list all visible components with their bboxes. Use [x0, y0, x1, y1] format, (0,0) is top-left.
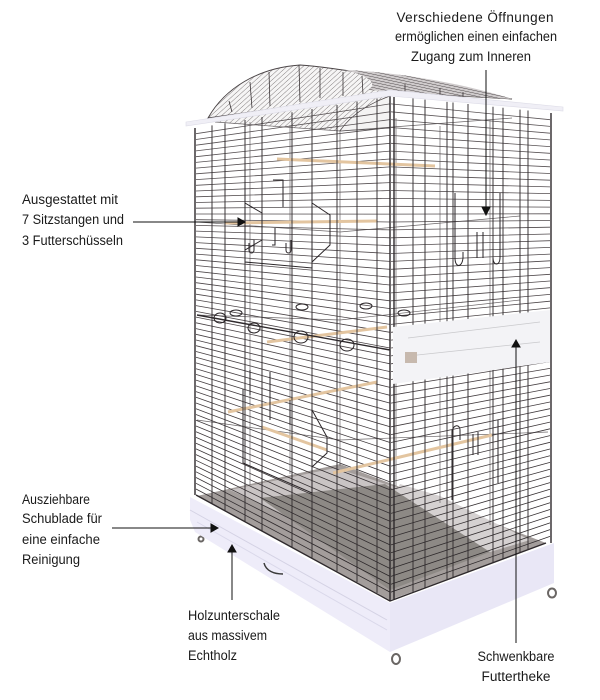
- vertical wires: [212, 98, 528, 593]
- doors, hooks and feed bowls: [243, 180, 500, 500]
- corner posts and frame: [195, 96, 551, 601]
- domed roof: [208, 65, 512, 131]
- swivel feeding counter: [393, 310, 550, 384]
- callout: openings: [395, 10, 557, 64]
- callout: swivel counter: [478, 649, 554, 684]
- callout: drawer: eine einfache: [22, 532, 100, 547]
- arrow: drawer: [112, 524, 218, 532]
- callout: solid wood base: Holzunterschale: [188, 608, 280, 623]
- arrow: wood base: [228, 545, 236, 600]
- callout: perches and bowls: [22, 192, 124, 248]
- callout: solid wood base: aus massivem: [188, 628, 267, 643]
- callout: openings: Zugang zum Inneren: [411, 49, 531, 64]
- back wires: [197, 118, 548, 525]
- horizontal wires: right face: [391, 104, 550, 592]
- arrow: openings: [482, 70, 490, 215]
- wooden base: [190, 497, 554, 652]
- perches: [225, 159, 492, 473]
- roof rim: [186, 90, 563, 126]
- callout: solid wood base: [188, 608, 280, 663]
- cage illustration: [186, 65, 563, 664]
- callout: solid wood base: Echtholz: [188, 648, 237, 663]
- callout: perches and bowls: Ausgestattet mit: [22, 192, 118, 207]
- arrow: perches: [133, 218, 245, 226]
- callout: drawer: Ausziehbare: [22, 492, 90, 507]
- callout: openings: Verschiedene Öffnungen: [396, 10, 554, 25]
- wheels: [198, 536, 556, 664]
- base tray: floor: [197, 464, 546, 600]
- callout: drawer: Schublade für: [22, 511, 102, 526]
- callout: drawer: [22, 492, 102, 567]
- arrow: swivel counter: [512, 340, 520, 643]
- callout: drawer: Reinigung: [22, 552, 80, 567]
- callout: perches and bowls: 3 Futterschüsseln: [22, 233, 123, 248]
- callout: swivel counter: Schwenkbare: [478, 649, 554, 664]
- horizontal wires: left face: [196, 104, 390, 592]
- callout: perches and bowls: 7 Sitzstangen und: [22, 212, 124, 227]
- callout: swivel counter: Futtertheke: [482, 669, 550, 684]
- door rings: [214, 303, 410, 351]
- callout: openings: ermöglichen einen einfachen: [395, 29, 557, 44]
